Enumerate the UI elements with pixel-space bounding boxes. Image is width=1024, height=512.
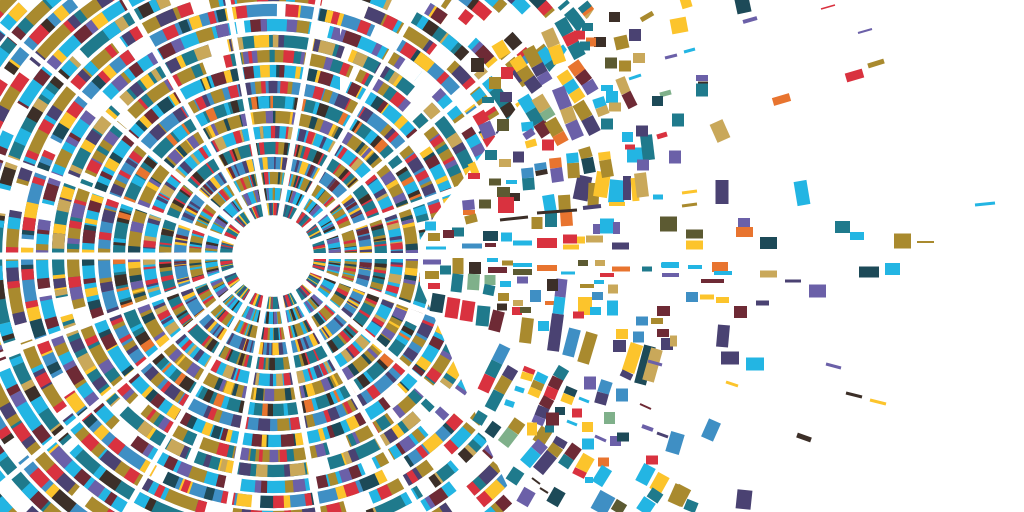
scattered sequence fragments, upper right xyxy=(468,1,884,176)
scattered sequence fragments, lower right xyxy=(477,325,886,512)
white fade region on the right xyxy=(420,0,1024,512)
scattered sequence fragments, centre right xyxy=(423,131,995,384)
white gaps thinning the rings on the right side xyxy=(340,0,600,512)
concentric sequence rings xyxy=(0,0,594,512)
white central hub xyxy=(233,216,313,296)
